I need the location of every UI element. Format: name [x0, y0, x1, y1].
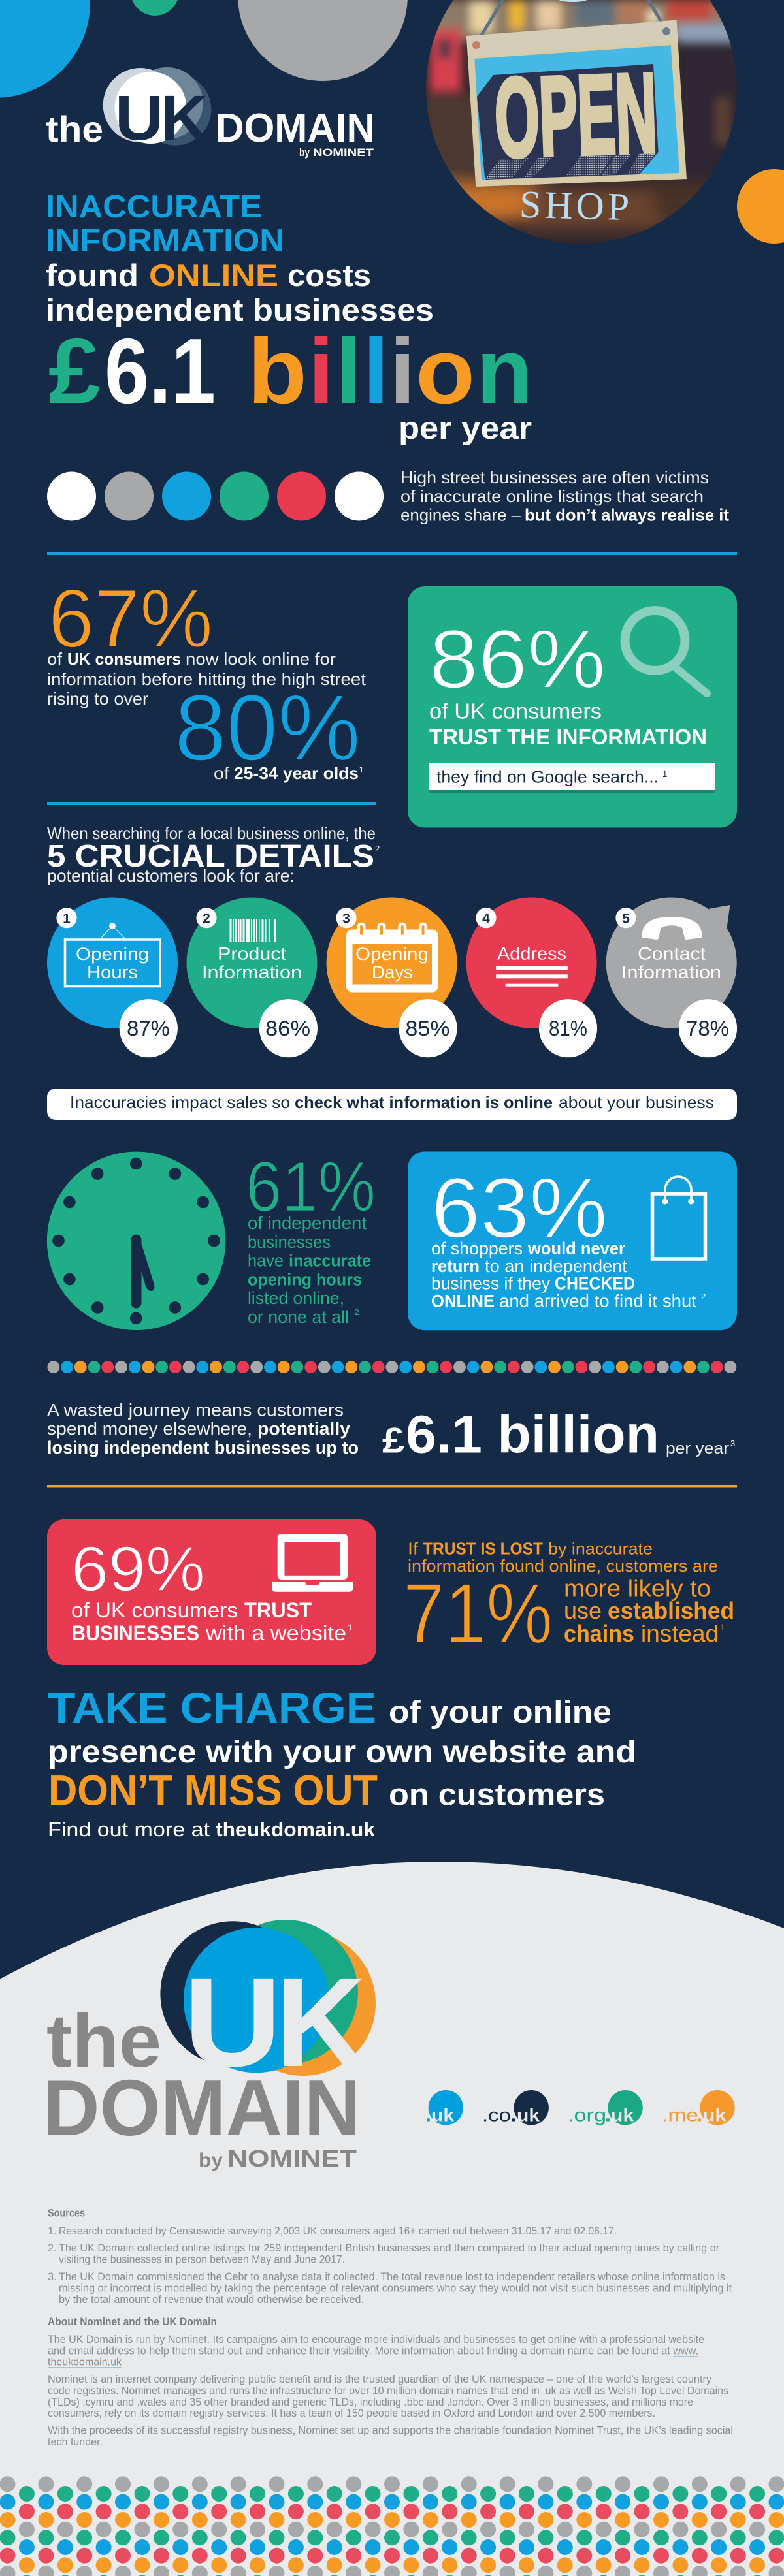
logo: .org.uk: .org: [568, 2105, 606, 2125]
sign navy block shadow: [477, 64, 659, 180]
footer dot pattern: [0, 2476, 784, 2576]
header logo: NOMINET: [313, 146, 374, 159]
intro text: engines share –: [400, 505, 521, 525]
text: a wasted journey: losing independent businesses up to: [47, 1438, 359, 1457]
panel: 69 percent trust businesses: of UK consumers: [71, 1598, 238, 1622]
decorative header circles: [0, 0, 784, 244]
about text block: theukdomain.uk: [48, 2356, 122, 2368]
heading: 5 crucial details: [47, 823, 380, 885]
stat: 71 percent more likely: by inaccurate: [548, 1538, 653, 1558]
logo: .me.uk: uk: [703, 2105, 727, 2125]
stat: 61 percent: opening hours: [248, 1269, 362, 1289]
detail 1: opening hours: Hours: [87, 962, 138, 982]
icon: address lines: [496, 966, 568, 987]
panel: 63 percent of shoppers: to an independent: [485, 1256, 627, 1276]
logo: .uk: uk: [431, 2105, 454, 2125]
about text block: Nominet is an internet company delivering public benefit and is the trusted guardian of the UK namespace – one of the world’s largest country: [48, 2374, 712, 2385]
call to action: on customers: [389, 1777, 605, 1813]
detail 4: address: 81%: [549, 1017, 587, 1040]
about text block: About Nominet and the UK Domain: [48, 2316, 217, 2328]
title: [46, 189, 434, 327]
panel: 86 percent trust: of UK consumers: [429, 699, 602, 724]
stat: 67 percent and 80 percent: 67%: [48, 572, 213, 665]
headline figure: £6.1 billion: l: [336, 319, 362, 423]
call to action: DON’T MISS OUT: [48, 1766, 378, 1814]
stat: 67 percent and 80 percent: UK consumers: [67, 649, 181, 669]
figure: 6.1 billion per year: £: [382, 1420, 404, 1461]
detail 4: address: Address: [497, 944, 566, 964]
panel: 69 percent trust businesses: TRUST: [244, 1598, 312, 1622]
sign dithered letter shadows: [485, 153, 657, 179]
domain extension logos: [425, 2090, 735, 2125]
stat: 61 percent: [246, 1147, 376, 1327]
stat: 67 percent and 80 percent: of: [214, 763, 230, 783]
headline figure: £6.1 billion: i: [389, 319, 416, 423]
detail 3: opening days: [327, 897, 457, 1057]
callout bar: check what information is online: Inaccuracies impact sales so: [70, 1092, 290, 1112]
panel: 63 percent of shoppers: would never: [527, 1239, 625, 1258]
callout bar: check what information is online: about your business: [559, 1092, 714, 1112]
panel: 86 percent trust: TRUST THE INFORMATION: [429, 725, 707, 749]
detail 1: opening hours: 87%: [127, 1017, 170, 1040]
headline figure: £6.1 billion: £: [48, 319, 101, 423]
search box: [429, 763, 715, 793]
sources text block: missing or incorrect is modelled by taking the percentage of relevant consumers who say they would not visit such businesses and multiplying it: [59, 2283, 732, 2295]
panel: 69 percent trust businesses: with a website: [205, 1621, 346, 1645]
logo: .org.uk: [568, 2090, 643, 2125]
call to action: of your online: [389, 1695, 612, 1730]
search box: 1: [662, 769, 667, 779]
icon: telephone handset: [642, 917, 702, 940]
headline figure: £6.1 billion: [48, 319, 532, 423]
figure: 6.1 billion per year: per year: [666, 1440, 729, 1457]
icon: hanging sign: [65, 923, 160, 986]
sources text block: visiting the businesses in person between May and June 2017.: [59, 2254, 345, 2266]
sources text block: Sources: [48, 2207, 85, 2219]
stat: 61 percent: have: [248, 1251, 284, 1271]
stat: 71 percent more likely: use: [564, 1597, 602, 1624]
footer panel background: [0, 1862, 784, 2576]
panel: 63 percent of shoppers: [408, 1152, 737, 1330]
intro text: of inaccurate online listings that search: [400, 486, 704, 506]
stat: 71 percent more likely: 71%: [403, 1565, 553, 1661]
header logo: U: [115, 82, 163, 153]
call to action: theukdomain.uk: [216, 1818, 376, 1841]
footer logo: [43, 1920, 376, 2172]
detail 4: address: 4: [482, 912, 490, 926]
headline figure: £6.1 billion: n: [476, 319, 532, 423]
logo: .co.uk: [482, 2090, 549, 2125]
detail 3: opening days: Days: [372, 962, 413, 982]
panel: 63 percent of shoppers: return: [431, 1256, 480, 1276]
text: a wasted journey: [47, 1400, 359, 1457]
stat: 71 percent more likely: 1: [720, 1622, 725, 1632]
logo: .uk: .: [425, 2105, 431, 2125]
heading: 5 crucial details: 2: [375, 844, 380, 853]
detail 2: product information: 2: [203, 912, 210, 926]
stat: 61 percent: of independent: [248, 1213, 367, 1233]
stat: 61 percent: businesses: [248, 1232, 331, 1252]
sources text block: 2.: [48, 2242, 57, 2254]
sources text block: The UK Domain commissioned the Cebr to analyse data it collected. The total revenue lost to independent retailers whose online information is: [59, 2271, 725, 2283]
header logo: by: [299, 146, 310, 159]
panel: 69 percent trust businesses: 1: [348, 1622, 353, 1632]
headline figure: £6.1 billion: i: [308, 319, 335, 423]
row of small coloured dots: [47, 1361, 736, 1373]
detail 4: address: [466, 897, 597, 1057]
stat: 67 percent and 80 percent: rising to over: [47, 689, 148, 708]
text: a wasted journey: potentially: [257, 1419, 350, 1439]
stat: 71 percent more likely: [403, 1538, 734, 1661]
footer logo: by: [199, 2150, 223, 2171]
header logo: the: [46, 108, 103, 150]
heading: 5 crucial details: potential customers look for are:: [47, 866, 295, 885]
panel: 69 percent trust businesses: 69%: [71, 1533, 205, 1604]
detail 3: opening days: 85%: [405, 1017, 449, 1040]
stat: 67 percent and 80 percent: 25-34 year olds: [234, 763, 359, 783]
stat: 61 percent: 61%: [246, 1147, 376, 1226]
logo: .co.uk: .co: [482, 2105, 511, 2125]
figure: 6.1 billion per year: 6.1 billion: [406, 1405, 659, 1465]
headline figure: £6.1 billion: b: [248, 319, 307, 423]
detail 5: contact information: 5: [622, 912, 630, 926]
logo: .co.uk: .: [511, 2105, 516, 2125]
panel: 63 percent of shoppers: and arrived to find it shut: [499, 1292, 697, 1311]
logo: .me.uk: .me: [662, 2105, 698, 2125]
panel: 86 percent trust: [408, 586, 737, 828]
intro text: High street businesses are often victims: [400, 468, 709, 487]
detail 5: contact information: 78%: [686, 1017, 729, 1040]
stat: 71 percent more likely: instead: [641, 1620, 719, 1647]
sources text block: 1.: [48, 2225, 57, 2237]
window lettering SHOP: SHOP: [519, 183, 630, 229]
header logo: K: [161, 82, 208, 153]
icon: shopping bag: [652, 1177, 706, 1259]
icon: barcode: [230, 919, 276, 942]
sources text block: by the total amount of revenue that would otherwise be received.: [59, 2294, 364, 2306]
icon: magnifying glass: [625, 611, 707, 693]
detail 5: contact information: [606, 897, 737, 1057]
logo: .org.uk: uk: [610, 2105, 634, 2125]
sources text block: The UK Domain collected online listings for 259 independent British businesses and then compared to their actual opening times by calling or: [59, 2242, 719, 2254]
icon: clock: [47, 1152, 225, 1330]
panel: 63 percent of shoppers: 2: [701, 1292, 706, 1301]
call to action: [48, 1683, 636, 1841]
heading: 5 crucial details: When searching for a local business online, the: [47, 823, 376, 843]
about text block: (TLDs) .cymru and .wales and 35 other branded and generic TLDs, including .bbc and .london. Over 3 million businesses, and millions more: [48, 2396, 693, 2408]
search box: they find on Google search...: [436, 767, 659, 786]
header logo: [46, 67, 375, 159]
logo: .org.uk: .: [605, 2105, 611, 2125]
about text block: and email address to help them stand out and enhance their visibility. More information about finding a domain name can be found at www.: [48, 2345, 698, 2357]
title: found: [46, 258, 139, 293]
stat: 61 percent: 2: [354, 1307, 359, 1317]
detail 2: product information: Information: [202, 962, 302, 982]
detail 1: opening hours: [47, 897, 178, 1057]
panel: 63 percent of shoppers: business if they: [431, 1273, 550, 1293]
headline figure: £6.1 billion: l: [363, 319, 389, 423]
detail 1: opening hours: Opening: [76, 944, 149, 964]
panel: 69 percent trust businesses: [47, 1519, 376, 1665]
logo: .me.uk: [662, 2090, 735, 2125]
detail 1: opening hours: 1: [63, 912, 71, 926]
logo: .co.uk: uk: [517, 2105, 540, 2125]
title: independent businesses: [46, 293, 434, 327]
stat: 71 percent more likely: more likely to: [564, 1575, 711, 1601]
panel: 63 percent of shoppers: 63%: [431, 1160, 608, 1256]
about text block: [48, 2316, 733, 2448]
panel: 63 percent of shoppers: ONLINE: [431, 1292, 495, 1311]
stat: 67 percent and 80 percent: of: [47, 649, 63, 669]
footer logo: K: [275, 1951, 367, 2093]
panel: 86 percent trust: 86%: [429, 612, 606, 705]
headline figure: £6.1 billion: 6.1: [105, 319, 216, 423]
stat: 67 percent and 80 percent: information before hitting the high street: [47, 669, 367, 689]
footer logo: DOMAIN: [43, 2063, 361, 2152]
stat: 71 percent more likely: established: [608, 1597, 734, 1624]
intro text: but don’t always realise it: [525, 505, 729, 525]
about text block: consumers, rely on its domain registry services. It has a team of 150 people based in Oxford and London and over 2,500 members.: [48, 2408, 655, 2419]
stat: 67 percent and 80 percent: now look online for: [186, 649, 336, 669]
stat: 67 percent and 80 percent: 1: [359, 765, 364, 774]
panel: 63 percent of shoppers: of shoppers: [431, 1239, 523, 1258]
stat: 61 percent: or none at all: [248, 1307, 349, 1327]
panel: 69 percent trust businesses: BUSINESSES: [71, 1621, 199, 1645]
intro text: [400, 468, 729, 525]
about text block: With the proceeds of its successful registry business, Nominet set up and supports the charitable foundation Nominet Trust, the UK’s leading social: [48, 2425, 733, 2437]
footer logo: U: [184, 1951, 282, 2093]
call to action: TAKE CHARGE: [48, 1683, 376, 1732]
sign blue field: [474, 45, 679, 180]
stat: 61 percent: inaccurate: [289, 1251, 371, 1271]
heading: 5 crucial details: 5 CRUCIAL DETAILS: [47, 839, 374, 874]
title: ONLINE: [149, 258, 278, 293]
title: INACCURATE: [46, 189, 262, 225]
stat: 67 percent and 80 percent: [47, 572, 367, 783]
text: a wasted journey: A wasted journey means customers: [47, 1400, 344, 1420]
header logo: DOMAIN: [216, 106, 375, 151]
detail 3: opening days: Opening: [355, 944, 429, 964]
row of six coloured dots: [47, 471, 384, 521]
icon: calendar: [346, 923, 438, 993]
stat: 71 percent more likely: If: [408, 1538, 419, 1558]
callout bar: check what information is online: check what information is online: [295, 1092, 553, 1112]
sign board: [466, 20, 687, 187]
detail 2: product information: 86%: [265, 1017, 310, 1040]
detail 2: product information: Product: [218, 944, 287, 964]
logo: .me.uk: .: [696, 2105, 702, 2125]
logo: .uk: [425, 2090, 463, 2125]
detail 5: contact information: Contact: [638, 944, 706, 964]
detail 5: contact information: Information: [621, 962, 721, 982]
footer logo: NOMINET: [227, 2145, 357, 2172]
stat: 71 percent more likely: information found online, customers are: [408, 1556, 718, 1576]
per year label: per year: [399, 411, 532, 446]
about text block: The UK Domain is run by Nominet. Its campaigns aim to encourage more individuals and businesses to get online with a professional website: [48, 2334, 704, 2345]
detail 3: opening days: 3: [342, 912, 350, 926]
call to action: Find out more at: [48, 1818, 210, 1841]
headline figure: £6.1 billion: o: [416, 319, 475, 423]
stat: 67 percent and 80 percent: 80%: [174, 675, 361, 780]
callout bar: check what information is online: [47, 1089, 737, 1120]
panel: 63 percent of shoppers: CHECKED: [555, 1273, 635, 1293]
call to action: presence with your own website and: [48, 1735, 636, 1770]
title: INFORMATION: [46, 223, 284, 259]
sources text block: [48, 2207, 732, 2306]
sources text block: 3.: [48, 2271, 57, 2283]
figure: 6.1 billion per year: 3: [730, 1439, 735, 1448]
detail 2: product information: [187, 897, 318, 1057]
sources text block: Research conducted by Censuswide surveying 2,003 UK consumers aged 16+ carried out between 31.05.17 and 02.06.17.: [59, 2225, 617, 2237]
text: a wasted journey: spend money elsewhere,: [47, 1419, 252, 1439]
footer logo: the: [46, 1999, 161, 2083]
photo: open sign in shop window: [425, 0, 738, 245]
stat: 71 percent more likely: TRUST IS LOST: [423, 1538, 543, 1558]
stat: 61 percent: listed online,: [248, 1288, 344, 1308]
about text block: code registries. Nominet manages and runs the infrastructure for over 10 million domain names that end in .uk as well as Welsh Top Level Domains: [48, 2385, 728, 2396]
icon: laptop: [272, 1534, 353, 1592]
title: costs: [287, 258, 371, 293]
about text block: tech funder.: [48, 2436, 103, 2448]
stat: 71 percent more likely: chains: [564, 1620, 634, 1647]
